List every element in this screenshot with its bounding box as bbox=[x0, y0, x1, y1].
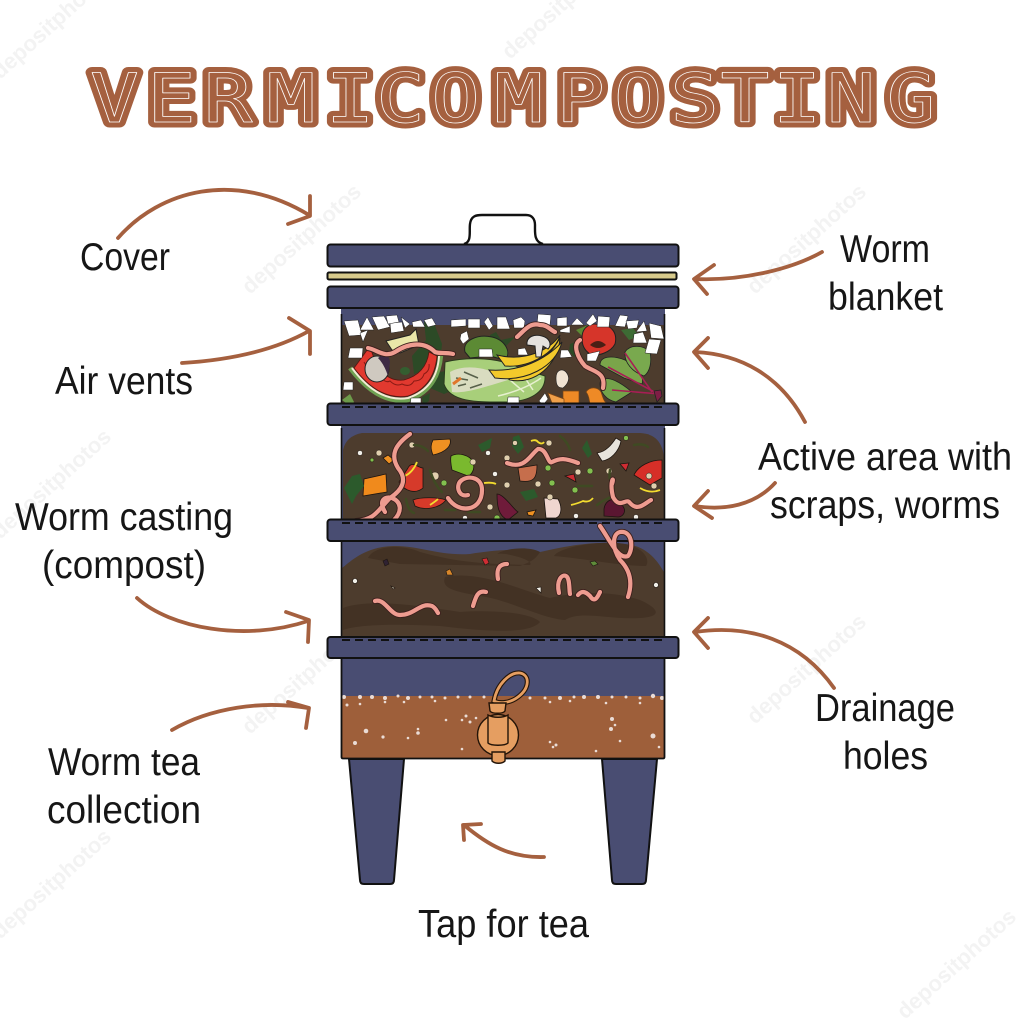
legs bbox=[349, 759, 657, 884]
worm crossing the tray rim bbox=[600, 526, 631, 597]
arrow: cover bbox=[118, 190, 310, 238]
small seeds and bits bbox=[358, 436, 657, 521]
label: Worm tea collection: collection bbox=[47, 789, 201, 832]
worms bbox=[375, 564, 600, 615]
rim: tray 2 bbox=[328, 520, 678, 541]
label: Active area with scraps, worms bbox=[758, 436, 1012, 527]
label: Drainage holes: holes bbox=[843, 735, 928, 778]
base tray: worm tea collection bbox=[341, 658, 665, 758]
dark stems bbox=[406, 436, 648, 513]
cabbage leaf bbox=[444, 359, 545, 402]
arrow: air vents bbox=[182, 318, 310, 363]
watermark: depositphotos bbox=[892, 904, 1021, 1024]
food scraps bbox=[363, 438, 662, 520]
label: Cover: Cover bbox=[80, 236, 170, 279]
tray 2: active middle tray bbox=[341, 425, 665, 521]
label: Worm blanket: blanket bbox=[828, 276, 943, 319]
white paper scraps bbox=[343, 314, 664, 406]
arrow: worm casting bbox=[137, 598, 309, 642]
worm tea liquid bbox=[342, 696, 665, 758]
rim: tray 1 bbox=[328, 404, 678, 425]
chard bbox=[600, 346, 662, 402]
label: Worm tea collection: Worm tea bbox=[48, 741, 200, 784]
worms bbox=[356, 434, 651, 521]
label: Worm blanket bbox=[828, 228, 943, 319]
worm bin bbox=[328, 215, 678, 884]
compost bits bbox=[352, 558, 658, 593]
lid handle bbox=[464, 215, 543, 244]
drainage holes bbox=[342, 407, 664, 640]
mushroom bbox=[527, 335, 550, 357]
label: Active area with scraps, worms: scraps, worms bbox=[770, 484, 1000, 527]
label: Drainage holes bbox=[815, 687, 955, 778]
arrow: tap bbox=[463, 824, 544, 857]
soil bbox=[342, 325, 664, 406]
label: Worm casting (compost) bbox=[15, 496, 233, 587]
rim: tray 3 bbox=[328, 637, 678, 658]
watermark: depositphotos bbox=[742, 609, 871, 729]
label: Drainage holes: Drainage bbox=[815, 687, 955, 730]
worms bbox=[368, 324, 603, 388]
tray 3: worm casting bbox=[341, 541, 665, 639]
apple core bbox=[386, 329, 419, 353]
compost bbox=[342, 543, 664, 639]
arrow: drainage holes bbox=[694, 618, 834, 688]
worm blanket bbox=[328, 272, 676, 280]
arrow: active area lower bbox=[694, 483, 775, 518]
tray 1: active top tray bbox=[341, 308, 665, 407]
watermelon bbox=[350, 346, 441, 401]
title: VERMICOMPOSTING bbox=[90, 59, 936, 138]
label: Worm tea collection bbox=[47, 741, 201, 832]
herbs bbox=[342, 318, 639, 406]
tomato bbox=[582, 324, 616, 355]
tap bbox=[478, 673, 527, 763]
garlic bbox=[556, 370, 569, 388]
label: Worm blanket: Worm bbox=[840, 228, 930, 271]
rim: top tray bbox=[328, 286, 678, 308]
label: Worm casting (compost): (compost) bbox=[42, 544, 206, 587]
tap loop bbox=[494, 673, 527, 703]
soil bbox=[343, 433, 664, 521]
banana bbox=[489, 335, 562, 381]
watermark: depositphotos bbox=[237, 179, 366, 299]
yellow bits bbox=[405, 440, 660, 505]
arrow: worm blanket bbox=[694, 252, 822, 294]
compost darker bands bbox=[343, 543, 656, 631]
watermark: depositphotos bbox=[237, 619, 366, 739]
orange peel bbox=[548, 388, 607, 407]
green pepper bbox=[465, 336, 508, 360]
tap valve bbox=[478, 714, 518, 756]
label: Air vents: Air vents bbox=[55, 360, 193, 403]
watermark: depositphotos bbox=[742, 179, 871, 299]
rims bbox=[328, 286, 678, 658]
label: Tap for tea: Tap for tea bbox=[418, 903, 589, 946]
cover lid bbox=[328, 244, 678, 266]
herbs bbox=[344, 435, 592, 504]
title: VERMICOMPOSTING bbox=[90, 59, 936, 138]
foam bubbles bbox=[342, 694, 664, 752]
label: Worm casting (compost): Worm casting bbox=[15, 496, 233, 539]
arrow: active area upper bbox=[694, 338, 805, 422]
arrow: worm tea bbox=[172, 702, 309, 730]
